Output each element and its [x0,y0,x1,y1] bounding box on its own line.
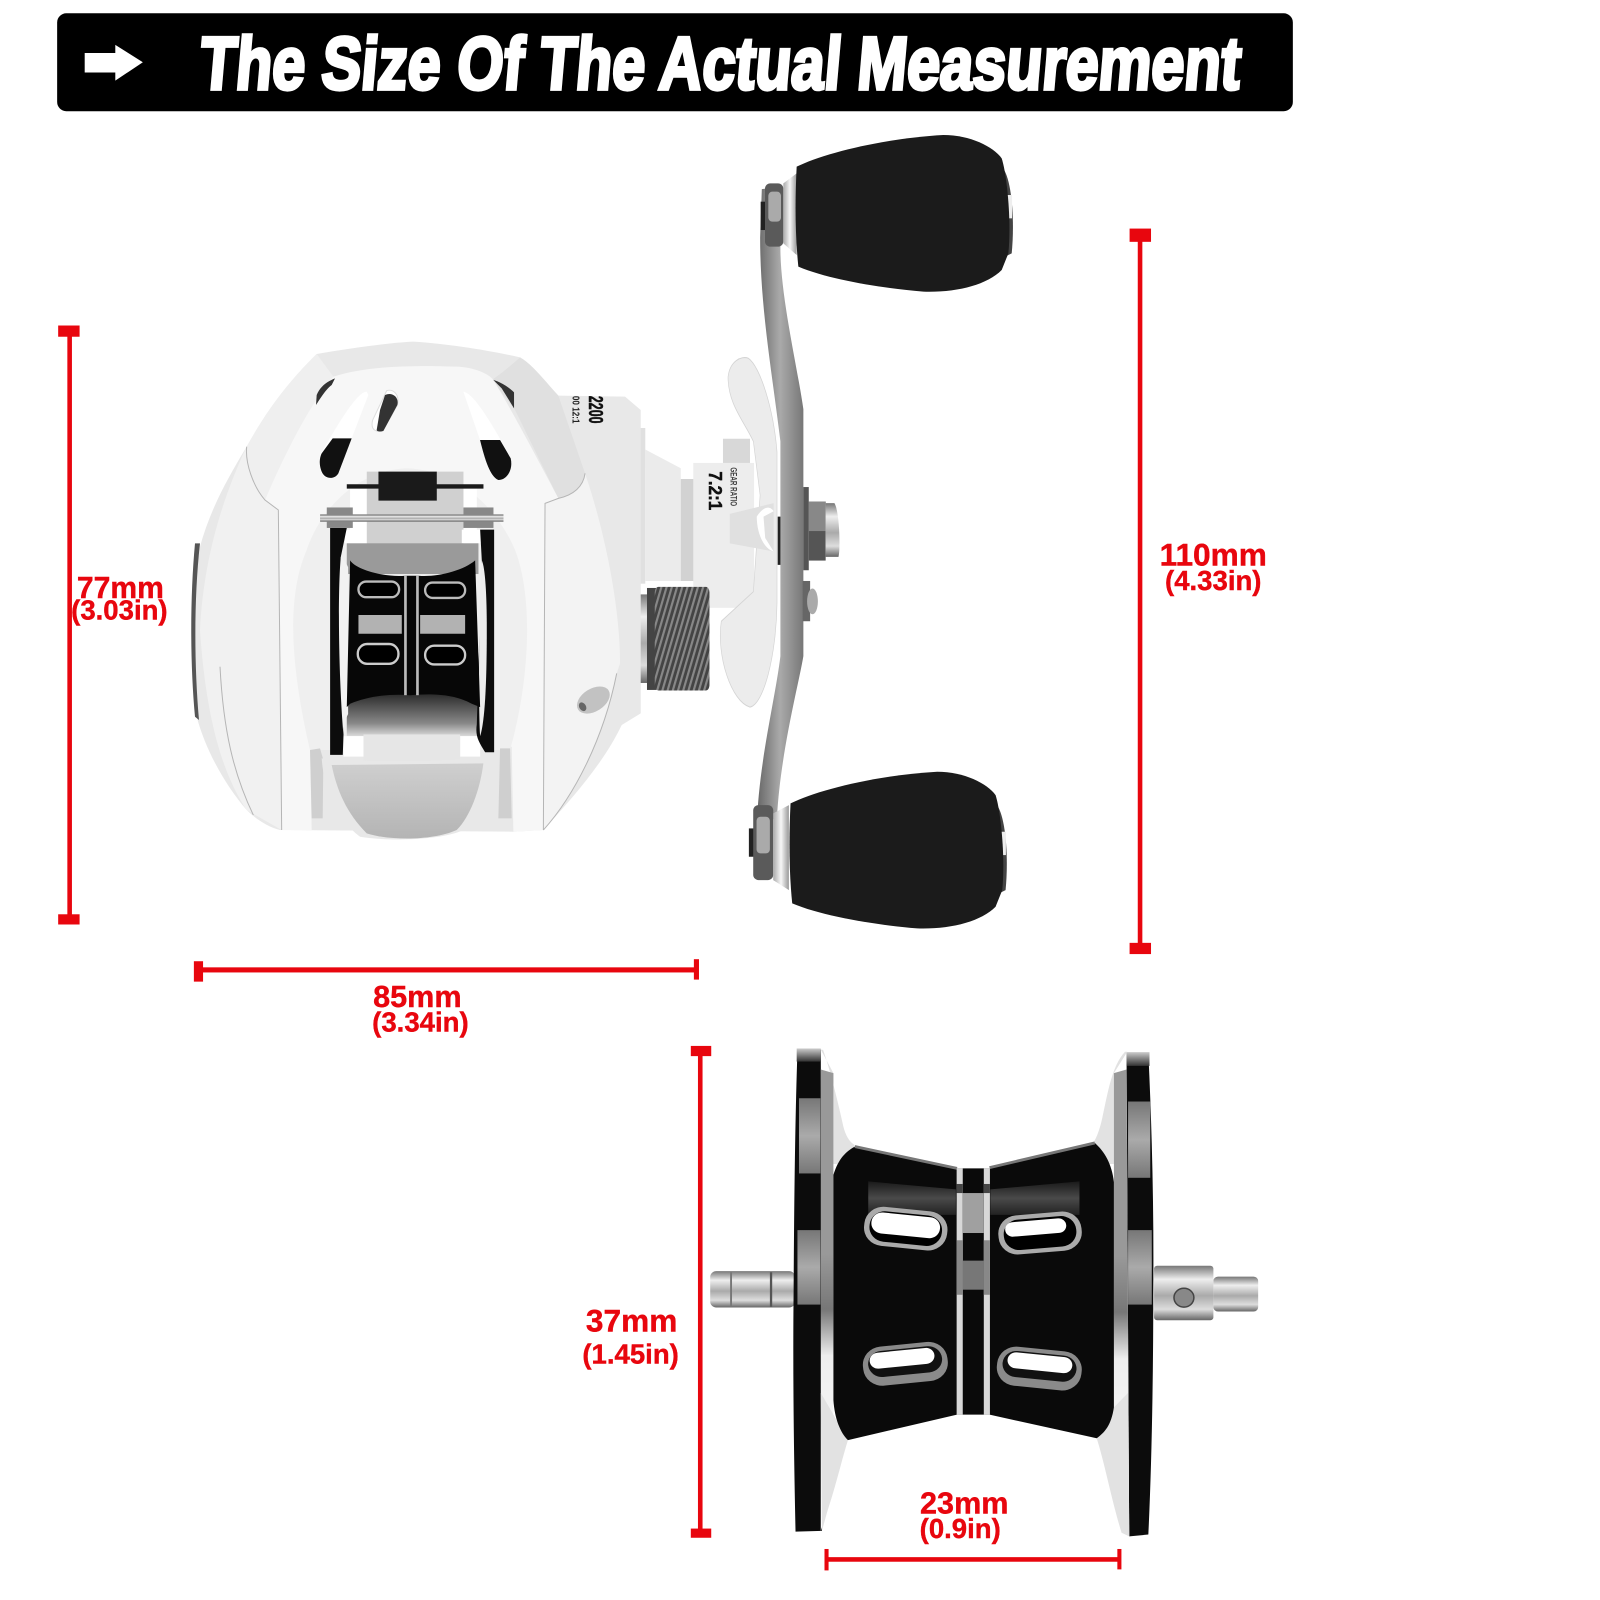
slots [861,1205,1084,1392]
left shaft [710,1271,795,1307]
knurled knob [639,587,709,690]
spool [710,1048,1258,1536]
label 0.9in: (0.9in) [920,1513,1001,1544]
left panel [200,447,282,830]
gear ratio label [705,467,739,510]
thumb bar [310,748,512,839]
star drag [720,358,783,707]
right shaft [1154,1266,1258,1320]
clutch block [347,472,483,501]
cone and stem [635,428,754,608]
seam lines [220,447,617,830]
label 3.34in: (3.34in) [372,1007,469,1038]
right panel [543,473,620,830]
barrel [833,1143,1114,1440]
label 37mm: 37mm [586,1303,677,1339]
centre band [957,1168,990,1415]
brushed highlights [868,1181,1079,1215]
label 1.45in: (1.45in) [582,1338,679,1369]
title bar [57,13,1293,111]
dimension: handle length 110mm [1130,229,1267,954]
dimension: spool width 23mm [824,1486,1121,1570]
small gear label: 00 12:1 [569,396,580,424]
bottom grip assembly [749,772,1007,929]
label 23mm: 23mm [920,1486,1009,1520]
dimension: spool diameter 37mm [582,1046,711,1538]
opening [293,468,527,750]
side label: 2200 [584,396,606,423]
label 4.33in: (4.33in) [1165,565,1261,596]
crank arm [757,186,803,828]
stem, star drag and knob behind reel [635,358,783,707]
right flange [1092,1052,1153,1536]
crank handle [749,135,1013,929]
spool, rod and clutch in opening [320,472,503,765]
front cage [265,366,558,832]
gear ratio label: 7.2:1 [705,471,726,510]
title: The Size Of The Actual Measurement [197,21,1245,105]
right cage shoulder [492,357,585,498]
spool in reel [330,528,494,765]
label 3.03in: (3.03in) [71,594,168,625]
inner back plate [350,489,477,547]
dimension: reel height 77mm [58,326,168,924]
dimension: reel width 85mm [194,959,699,1038]
icon: arrow [85,45,143,81]
reel body shell [192,342,641,832]
nut [803,487,839,621]
top grip assembly [761,135,1013,292]
vents [316,378,514,480]
reel body front view [191,342,641,839]
label 77mm: 77mm [77,572,164,605]
gear ratio small text: GEAR RATIO [729,467,739,506]
left dark edge [191,543,200,720]
label 85mm: 85mm [373,980,462,1014]
label 110mm: 110mm [1160,536,1267,572]
guide rod [320,507,503,528]
bottom flange flares [821,1393,1129,1536]
side hole [572,681,615,719]
barrel top edge [855,1143,1095,1168]
left flange [793,1048,855,1532]
side label [569,396,606,424]
left cage shoulder [246,354,333,500]
